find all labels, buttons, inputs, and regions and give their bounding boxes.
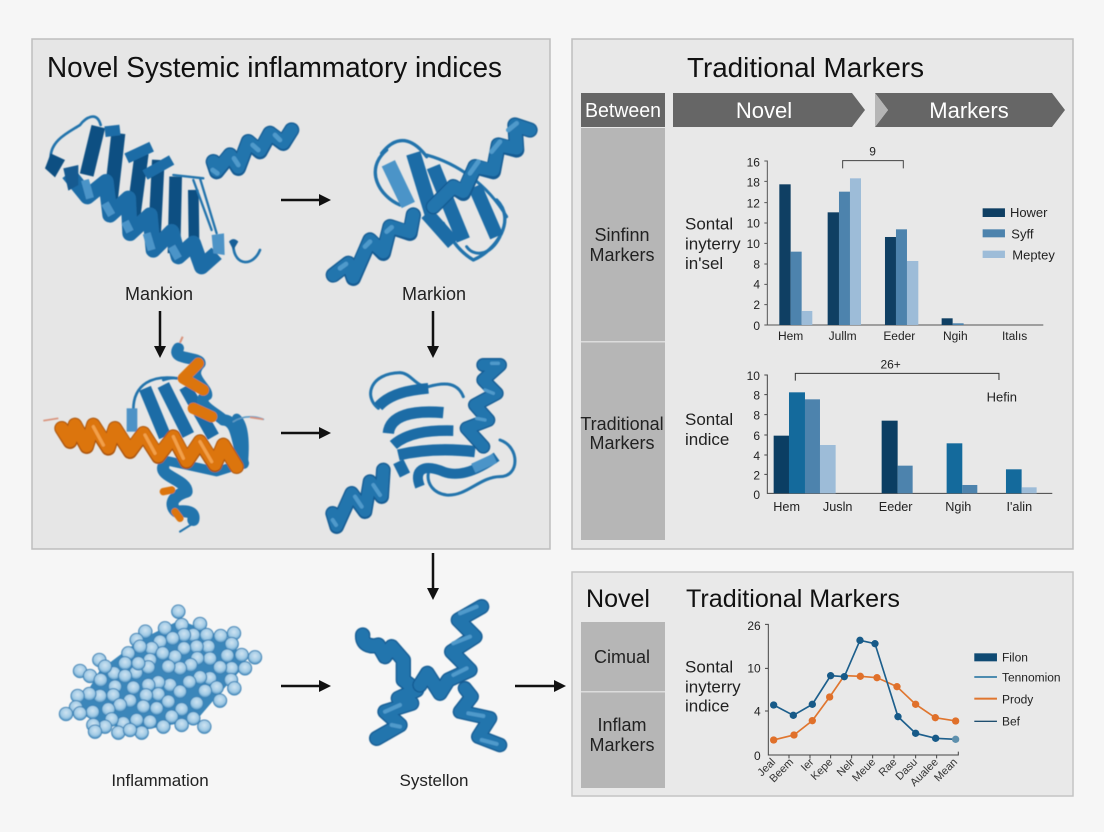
label: Markion: Markion [402, 284, 466, 304]
heading: Novel: Novel [586, 585, 650, 613]
header arrow: Markers: Markers [929, 98, 1009, 123]
row label: Traditional Markers: Markers [589, 433, 655, 453]
line chart: Mean [932, 756, 960, 784]
arrow: protein 2 down to protein 4 [427, 311, 439, 358]
y axis title: Sontal [685, 410, 733, 429]
bar chart: top: 12 [747, 196, 760, 210]
row label: Cimual: Cimual [594, 647, 650, 667]
protein 4: curved sheet with helix [333, 363, 515, 527]
bar chart: top: Hem [778, 329, 803, 343]
panel: novel traditional markers [572, 572, 1073, 796]
header arrow: Markers [875, 93, 1065, 127]
y axis title: indice [685, 430, 729, 449]
label: Systellon: Systellon [400, 771, 468, 790]
bar chart: top: 8 [753, 257, 760, 271]
y axis title: inyterry [685, 678, 741, 697]
arrow: protein 1 to protein 2 [281, 194, 331, 206]
bar chart: bottom: Eeder [879, 500, 913, 514]
line chart: Meue [850, 756, 878, 784]
y axis title: in'sel [685, 254, 723, 273]
protein 5: systellon helices [363, 607, 500, 745]
y axis title: inyterry [685, 234, 741, 253]
bar chart: top: 2 [753, 298, 760, 312]
protein 3: orange and blue helices [43, 337, 263, 532]
header arrow: Novel [673, 93, 865, 127]
bar chart: top: 0 [753, 319, 760, 333]
arrow: inflammation to systellon [281, 680, 331, 692]
bar chart: top: Ngih [943, 329, 968, 343]
label: Mankion: Mankion [125, 284, 193, 304]
row label: Sinfinn Markers: Sinfinn [594, 225, 650, 245]
bar chart: top: 4 [753, 278, 760, 292]
bar chart: bottom: Hefin [987, 390, 1017, 405]
arrow: protein 3 to protein 4 [281, 427, 331, 439]
row labels column: bottom panel [581, 622, 665, 788]
line chart: 0 [754, 749, 761, 763]
bar chart: top: 9 [869, 145, 876, 159]
line chart: Beem [767, 756, 796, 785]
line chart [685, 619, 1061, 789]
legend: Tennomion [1002, 671, 1061, 685]
bar chart: bottom: Ngih [945, 500, 971, 514]
line chart: Nelr [835, 756, 858, 779]
line chart: Aualee [908, 756, 941, 789]
arrow: systellon to bottom panel [515, 680, 566, 692]
bar chart: top: 10 [747, 217, 760, 231]
bar chart: bottom: 8 [753, 409, 760, 423]
bar chart: bottom: 2 [753, 468, 760, 482]
row label: Sinfinn Markers: Markers [589, 245, 655, 265]
bar chart: top: 18 [747, 176, 760, 190]
line chart: 10 [747, 662, 761, 676]
bar chart: bottom: 26+ [880, 358, 901, 372]
bar chart: top: 16 [747, 156, 760, 170]
row label: Inflam Markers: Inflam [597, 715, 647, 735]
header cell: Between: Between [585, 100, 661, 122]
y axis title: Sontal [685, 214, 733, 233]
bar chart: top: Italıs [1002, 329, 1027, 343]
line chart: Dasu [893, 756, 920, 783]
legend: Meptey [1012, 247, 1055, 262]
line chart: Kepe [809, 756, 835, 783]
heading: traditional markers: Traditional Markers [687, 52, 924, 83]
line chart: Ier [799, 756, 817, 774]
row labels column [580, 128, 665, 540]
line chart: Rae [877, 756, 899, 779]
arrow: protein 1 down to protein 3 [154, 311, 166, 358]
line chart: Jeal [755, 756, 778, 779]
bar chart: top: Jullm [829, 329, 857, 343]
bar chart: bottom: 6 [753, 429, 760, 443]
legend: Syff [1011, 226, 1034, 241]
bar chart: bottom: 0 [753, 488, 760, 502]
panel: novel systemic inflammatory indices [32, 39, 550, 549]
line chart: 4 [754, 705, 761, 719]
legend: Filon [1002, 651, 1028, 665]
y axis title: indice [685, 697, 729, 716]
legend: Prody [1002, 693, 1033, 707]
bar chart: bottom: Jusln [823, 500, 852, 514]
bar chart: top [685, 145, 1055, 343]
header arrow: Novel: Novel [736, 98, 792, 123]
line chart: 26 [747, 619, 761, 633]
row label: Inflam Markers: Markers [589, 735, 655, 755]
bar chart: top: Eeder [883, 329, 915, 343]
legend [974, 651, 1061, 729]
label: Inflammation: Inflammation [111, 771, 209, 790]
row label: Traditional Markers: Traditional [580, 414, 664, 434]
title: novel systemic inflammatory indices: Novel Systemic inflammatory indices [47, 52, 502, 84]
legend: Bef [1002, 715, 1021, 729]
bar chart: bottom: 4 [753, 449, 760, 463]
arrow: panel down to systellon [427, 553, 439, 600]
header cell: Between [581, 93, 665, 127]
bar chart: bottom: I'alin [1006, 500, 1032, 514]
y axis title: Sontal [685, 658, 733, 677]
legend [983, 205, 1055, 262]
icon: inflammation molecular cluster [59, 605, 262, 739]
bar chart: top: 10 [747, 237, 760, 251]
panel: traditional markers [572, 39, 1073, 549]
bar chart: bottom: 10 [747, 369, 760, 383]
heading: Traditional Markers: Traditional Markers [686, 585, 900, 613]
protein 1: beta sheet with helix [45, 117, 292, 267]
bar chart: bottom: 8 [753, 389, 760, 403]
legend: Hower [1010, 205, 1048, 220]
protein 2: beta barrel with helices [333, 123, 530, 278]
bar chart: bottom: Hem [773, 500, 800, 514]
bar chart: bottom [685, 358, 1052, 514]
